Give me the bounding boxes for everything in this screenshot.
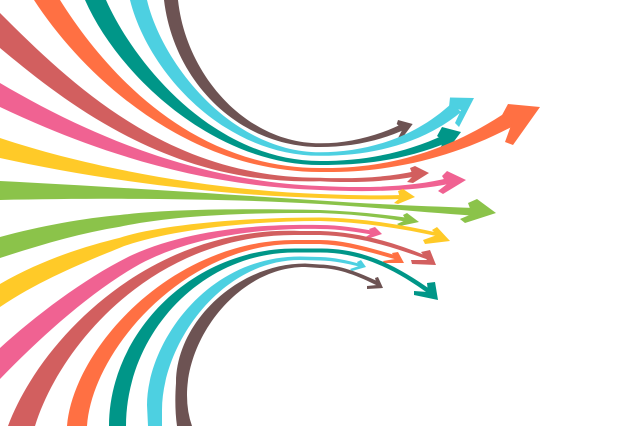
arrow: top red <box>0 13 429 183</box>
arrow: top yellow <box>0 138 415 204</box>
arrow: top teal <box>85 0 461 165</box>
arrow: top brown <box>164 0 413 147</box>
arrow: lower cyan <box>147 256 366 426</box>
arrow: lower orange <box>67 240 404 426</box>
arrow: lower brown <box>175 264 383 426</box>
arrow: lower yellow <box>0 218 450 307</box>
arrow: lower teal <box>109 248 438 426</box>
arrow: lower red <box>8 231 436 426</box>
arrow: lower green <box>0 209 419 258</box>
arrow: long green <box>0 181 496 223</box>
arrow: top cyan <box>130 0 474 156</box>
arrow: top pink <box>0 83 466 194</box>
arrow: lower pink <box>0 225 382 379</box>
arrow: top orange <box>34 0 540 172</box>
